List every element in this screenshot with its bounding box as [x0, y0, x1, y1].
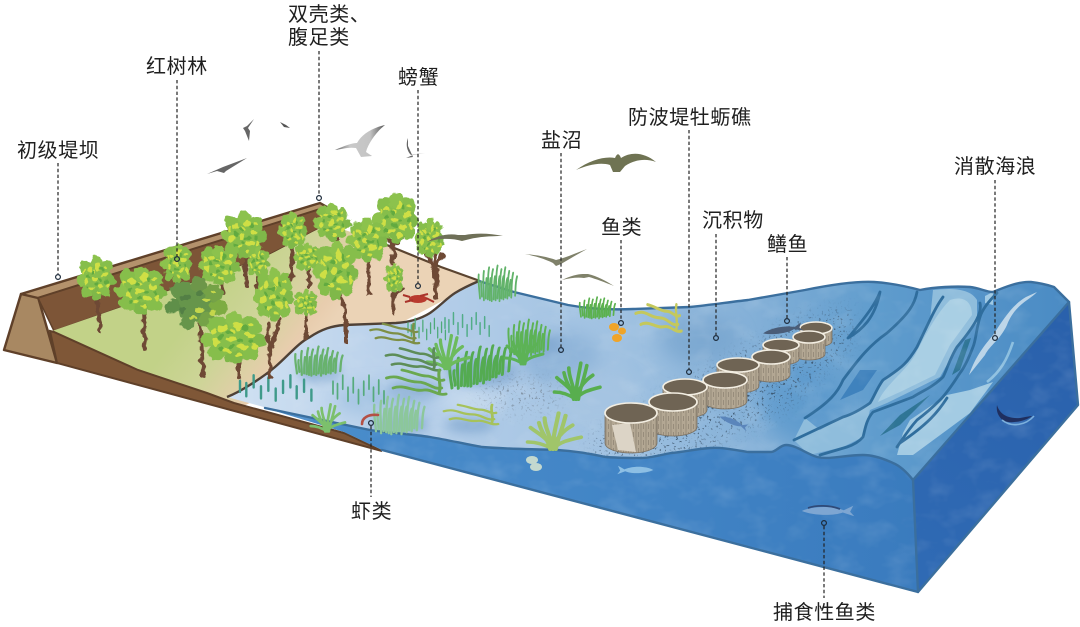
- shoreline: [227, 281, 479, 397]
- tree dark: [165, 277, 227, 377]
- bird: [525, 249, 587, 266]
- wave: foam lower band: [897, 382, 993, 455]
- bird: [562, 274, 614, 286]
- label: eel: 鳝鱼: [767, 233, 808, 256]
- grass halos: [298, 335, 562, 434]
- label: predatory fish: [773, 521, 876, 624]
- tree: [253, 268, 294, 377]
- bird: [243, 119, 254, 141]
- tree: [77, 256, 115, 330]
- label: primary dam: [17, 139, 99, 279]
- bird: [576, 154, 656, 172]
- label: crab: 螃蟹: [398, 66, 439, 89]
- tree: [221, 211, 266, 287]
- sediment speckle: [478, 310, 850, 460]
- label: sediment: 沉积物: [702, 209, 764, 232]
- coast outlines: [265, 281, 1078, 592]
- marsh and sea floor: [227, 281, 1069, 480]
- bird: [335, 125, 385, 157]
- label: sediment: [702, 209, 764, 340]
- label: fish: [601, 216, 642, 325]
- fish: predator: [802, 506, 854, 516]
- wave: crest notch: [985, 292, 993, 305]
- label: bivalves and gastropods: [288, 3, 370, 200]
- wave: light band: [794, 289, 977, 455]
- fish: reef: [718, 413, 749, 431]
- tree: [313, 240, 358, 343]
- wave: teal shadow: [880, 338, 971, 436]
- bird: [406, 138, 425, 158]
- tree: [197, 245, 240, 293]
- wave: crest lines: [794, 292, 997, 455]
- tree: [415, 218, 445, 298]
- label: bivalves and gastropods: 腹足类: [288, 26, 350, 49]
- wave zone: [794, 289, 1037, 455]
- marsh grass and sticks: [240, 266, 615, 449]
- tree: [384, 263, 404, 312]
- label: crab: [398, 66, 439, 288]
- coastal land: mangrove ground: [52, 224, 480, 408]
- oyster reef rings: [605, 322, 832, 453]
- tree: [278, 211, 308, 280]
- tree: [115, 265, 167, 350]
- bird: [280, 122, 290, 128]
- sea: front cut face: [265, 408, 918, 592]
- bird: [427, 234, 503, 242]
- label: mangrove: 红树林: [146, 55, 208, 78]
- wave: pale centre: [878, 299, 972, 402]
- tree: [346, 218, 387, 293]
- primary dam: top ridge: [21, 203, 327, 298]
- label: wave dissipation: [954, 155, 1036, 340]
- label: mangrove: [146, 55, 208, 261]
- wave: pale foam streak: [969, 292, 1037, 375]
- shrimp: [362, 415, 378, 424]
- sea: right cut face: [913, 302, 1078, 592]
- land back edge: [382, 243, 480, 281]
- label: oyster reef breakwater: [628, 106, 752, 374]
- fish: eel: [762, 322, 803, 337]
- label: shrimp: 虾类: [351, 500, 392, 523]
- seaweed: [370, 305, 682, 424]
- label: predatory fish: 捕食性鱼类: [773, 601, 876, 624]
- tree: [372, 192, 420, 263]
- label: shrimp: [351, 421, 392, 523]
- tree: [161, 243, 193, 293]
- label: eel: [767, 233, 808, 323]
- wave: crest streak: [987, 342, 1013, 382]
- label: wave dissipation: 消散海浪: [954, 155, 1036, 178]
- tree back row: [313, 203, 351, 247]
- watercolour mottling: [298, 284, 1076, 586]
- label: salt marsh: [541, 129, 582, 352]
- tree: [245, 247, 270, 300]
- shells: [526, 456, 542, 471]
- fish: pale: [617, 466, 653, 474]
- label: primary dam: 初级堤坝: [17, 139, 99, 162]
- primary dam: front soil band: [50, 331, 382, 451]
- label: oyster reef breakwater: 防波堤牡蛎礁: [628, 106, 752, 129]
- label: salt marsh: 盐沼: [541, 129, 582, 152]
- label: fish: 鱼类: [601, 216, 642, 239]
- label: bivalves and gastropods: 双壳类、: [288, 3, 370, 26]
- tree: [201, 312, 266, 377]
- marsh water shading: [330, 315, 840, 440]
- orange fish school: [609, 323, 626, 342]
- wave: mid band: [840, 370, 877, 400]
- mangrove trees: [77, 192, 445, 377]
- primary dam: left cut face: [4, 294, 57, 363]
- primary dam: inner slope: [38, 207, 328, 331]
- bird: [207, 158, 247, 174]
- tree: [293, 242, 323, 288]
- tree: [293, 290, 318, 337]
- crab: [403, 294, 434, 303]
- birds: [207, 119, 656, 286]
- fish: marlin: [997, 405, 1034, 425]
